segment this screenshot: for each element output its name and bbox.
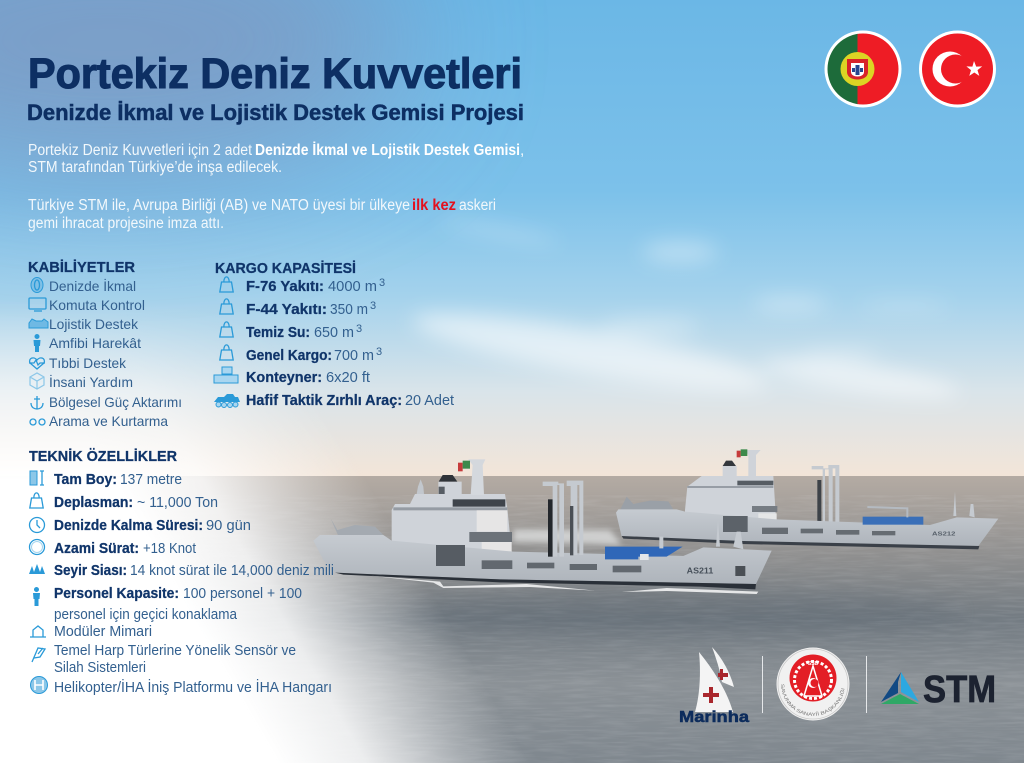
bow wave behind [513,529,622,545]
background: dark water under ships [400,590,960,634]
flag: Turkey [919,30,996,108]
capabilities list text [49,277,182,429]
row: helicopter platform: Helikopter/İHA İniş Platformu ve İHA Hangarı [54,678,332,696]
hull openings [482,560,512,569]
row: armoured vehicles [214,393,454,409]
panel: cargo capacity [214,260,454,409]
row: fresh water: 3 [356,323,362,335]
logo: STM: STM [923,669,996,711]
blue cargo [605,547,683,559]
row: displacement: Deplasman: [54,495,133,511]
lower gallery [469,532,512,542]
bow mast [953,492,975,517]
panel: capabilities [28,259,182,429]
bow fittings [659,520,743,549]
hull number: AS211 [687,566,714,575]
row: fresh water: 650 m [314,325,354,341]
background: sea [0,476,1024,763]
helicopter [620,497,673,510]
helicopter [331,518,383,536]
heading: capabilities: KABİLİYETLER [28,259,136,276]
row: personnel: personel için geçici konaklama [54,607,238,623]
intro paragraph 2: Türkiye STM ile, Avrupa Birliği (AB) ve NATO üyesi bir ülkeye [28,197,410,214]
mast [468,459,485,495]
row: armoured vehicles: Hafif Taktik Zırhlı Araç: [246,393,402,409]
intro paragraph 2: ilk kez [412,197,456,214]
capabilities list text: Denizde İkmal [49,277,136,294]
logo: SSB seal: SSB [808,661,819,667]
row: range: 14 knot sürat ile 14,000 deniz mili [130,563,334,579]
bridge windows [737,481,773,485]
title: Portekiz Deniz Kuvvetleri [28,50,522,98]
replenishment masts [817,480,821,525]
intro paragraph 1: Denizde İkmal ve Lojistik Destek Gemisi [255,142,520,159]
bridge windows [453,499,505,507]
waterline [335,573,756,589]
row: fresh water: Temiz Su: [246,325,310,341]
capabilities list text: Bölgesel Güç Aktarımı [49,394,182,410]
row: sensor and weapon systems: Silah Sistemleri [54,660,146,676]
ship: AS212 background vessel [616,449,998,549]
row: personnel [33,586,302,623]
row: F-76 fuel [220,277,385,295]
row: personnel: Personel Kapasite: [54,586,179,602]
icon: replenishment [31,278,43,292]
hull number: AS212 [932,532,955,538]
background: white fade on left [0,320,516,763]
divider [762,656,763,713]
row: speed: Azami Sürat: [54,541,139,557]
replenishment masts [548,499,553,557]
row: range [29,563,334,579]
flag [737,449,747,457]
intro paragraph 1: STM tarafından Türkiye’de inşa edilecek. [28,159,282,176]
funnel details [439,487,445,494]
logo: Marinha [679,647,749,726]
wake foam [370,576,758,594]
background: sky [0,0,1024,477]
panel: technical specifications [29,448,334,696]
row: length [30,471,182,488]
icon: person [34,334,40,352]
capabilities list text: İnsani Yardım [49,373,133,390]
row: endurance: Denizde Kalma Süresi: [54,518,203,534]
background: clouds [409,217,961,405]
background: darker upper-left sky [0,0,410,170]
superstructure [392,482,512,555]
intro paragraph 1 [28,142,524,176]
intro paragraph 2 [28,197,496,232]
row: endurance [30,518,251,534]
intro paragraph 1: , [520,142,524,159]
row: sensor and weapon systems: Temel Harp Türlerine Yönelik Sensör ve [54,643,296,659]
row: modular architecture: Modüler Mimari [54,624,152,640]
flag: Portugal [824,30,902,108]
row: length: 137 metre [120,472,182,488]
logo: SSB seal [776,648,850,720]
row: containers: 6x20 ft [326,370,370,386]
row: containers [214,367,370,386]
row: F-44 fuel: F-44 Yakıtı: [246,302,327,318]
row: personnel: 100 personel + 100 [183,586,302,602]
row: speed [30,540,196,557]
intro paragraph 1: Portekiz Deniz Kuvvetleri için 2 adet [28,142,253,159]
row: containers: Konteyner: [246,370,322,386]
capabilities list text: Amfibi Harekât [49,335,141,351]
background: sea ripples [0,495,1024,763]
icon: logistics ship [29,319,48,328]
capabilities list text: Komuta Kontrol [49,297,145,313]
subtitle: Denizde İkmal ve Lojistik Destek Gemisi Projesi [27,100,524,125]
row: sensor and weapon systems [32,643,296,676]
divider [866,656,867,713]
anchor recess [735,566,745,576]
hull [313,535,772,584]
hangar door [436,545,465,566]
row: displacement [30,493,218,511]
heading: cargo capacity: KARGO KAPASİTESİ [215,260,356,277]
row: F-44 fuel: 3 [370,300,376,312]
heading: technical specifications: TEKNİK ÖZELLİKLER [29,448,178,465]
row: F-44 fuel [220,299,376,318]
row: general cargo: 3 [376,346,382,358]
row: range: Seyir Siası: [54,563,127,579]
row: fresh water [220,322,362,341]
logo: Marinha: Marinha [679,709,749,726]
row: endurance: 90 gün [206,518,251,534]
openings [723,516,748,532]
icon: monitor [29,298,46,311]
row: displacement: ~ 11,000 Ton [137,495,218,511]
superstructure [685,450,777,530]
intro paragraph 2: gemi ihracat projesine imza attı. [28,215,224,232]
flag [458,461,470,471]
row: armoured vehicles: 20 Adet [405,393,454,409]
capabilities list text: Tıbbi Destek [49,355,127,371]
row: F-76 fuel: 3 [379,277,385,289]
white face [477,510,507,532]
ship: AS211 foreground vessel [313,459,772,594]
row: general cargo: 700 m [334,348,374,364]
row: F-76 fuel: 4000 m [328,279,377,295]
hull [616,509,998,546]
logo: STM [881,669,996,711]
icon: heart pulse [29,358,45,369]
bridge deck band [393,507,507,510]
row: general cargo [220,345,382,364]
icon: binoculars [30,419,45,425]
intro paragraph 2: askeri [459,197,496,214]
capabilities list text: Lojistik Destek [49,316,139,332]
capabilities list text: Arama ve Kurtarma [49,413,168,429]
row: F-76 fuel: F-76 Yakıtı: [246,279,324,295]
logo: SSB seal: SAVUNMA SANAYİİ BAŞKANLIĞI [781,684,844,716]
row: length: Tam Boy: [54,472,117,488]
cargo [863,517,923,525]
funnel top [723,461,736,466]
row: speed: +18 Knot [143,541,196,557]
icon: aid box [30,373,44,389]
row: general cargo: Genel Kargo: [246,348,332,364]
waterline [622,536,979,549]
row: F-44 fuel: 350 m [330,302,368,318]
icon: anchor [31,396,43,409]
